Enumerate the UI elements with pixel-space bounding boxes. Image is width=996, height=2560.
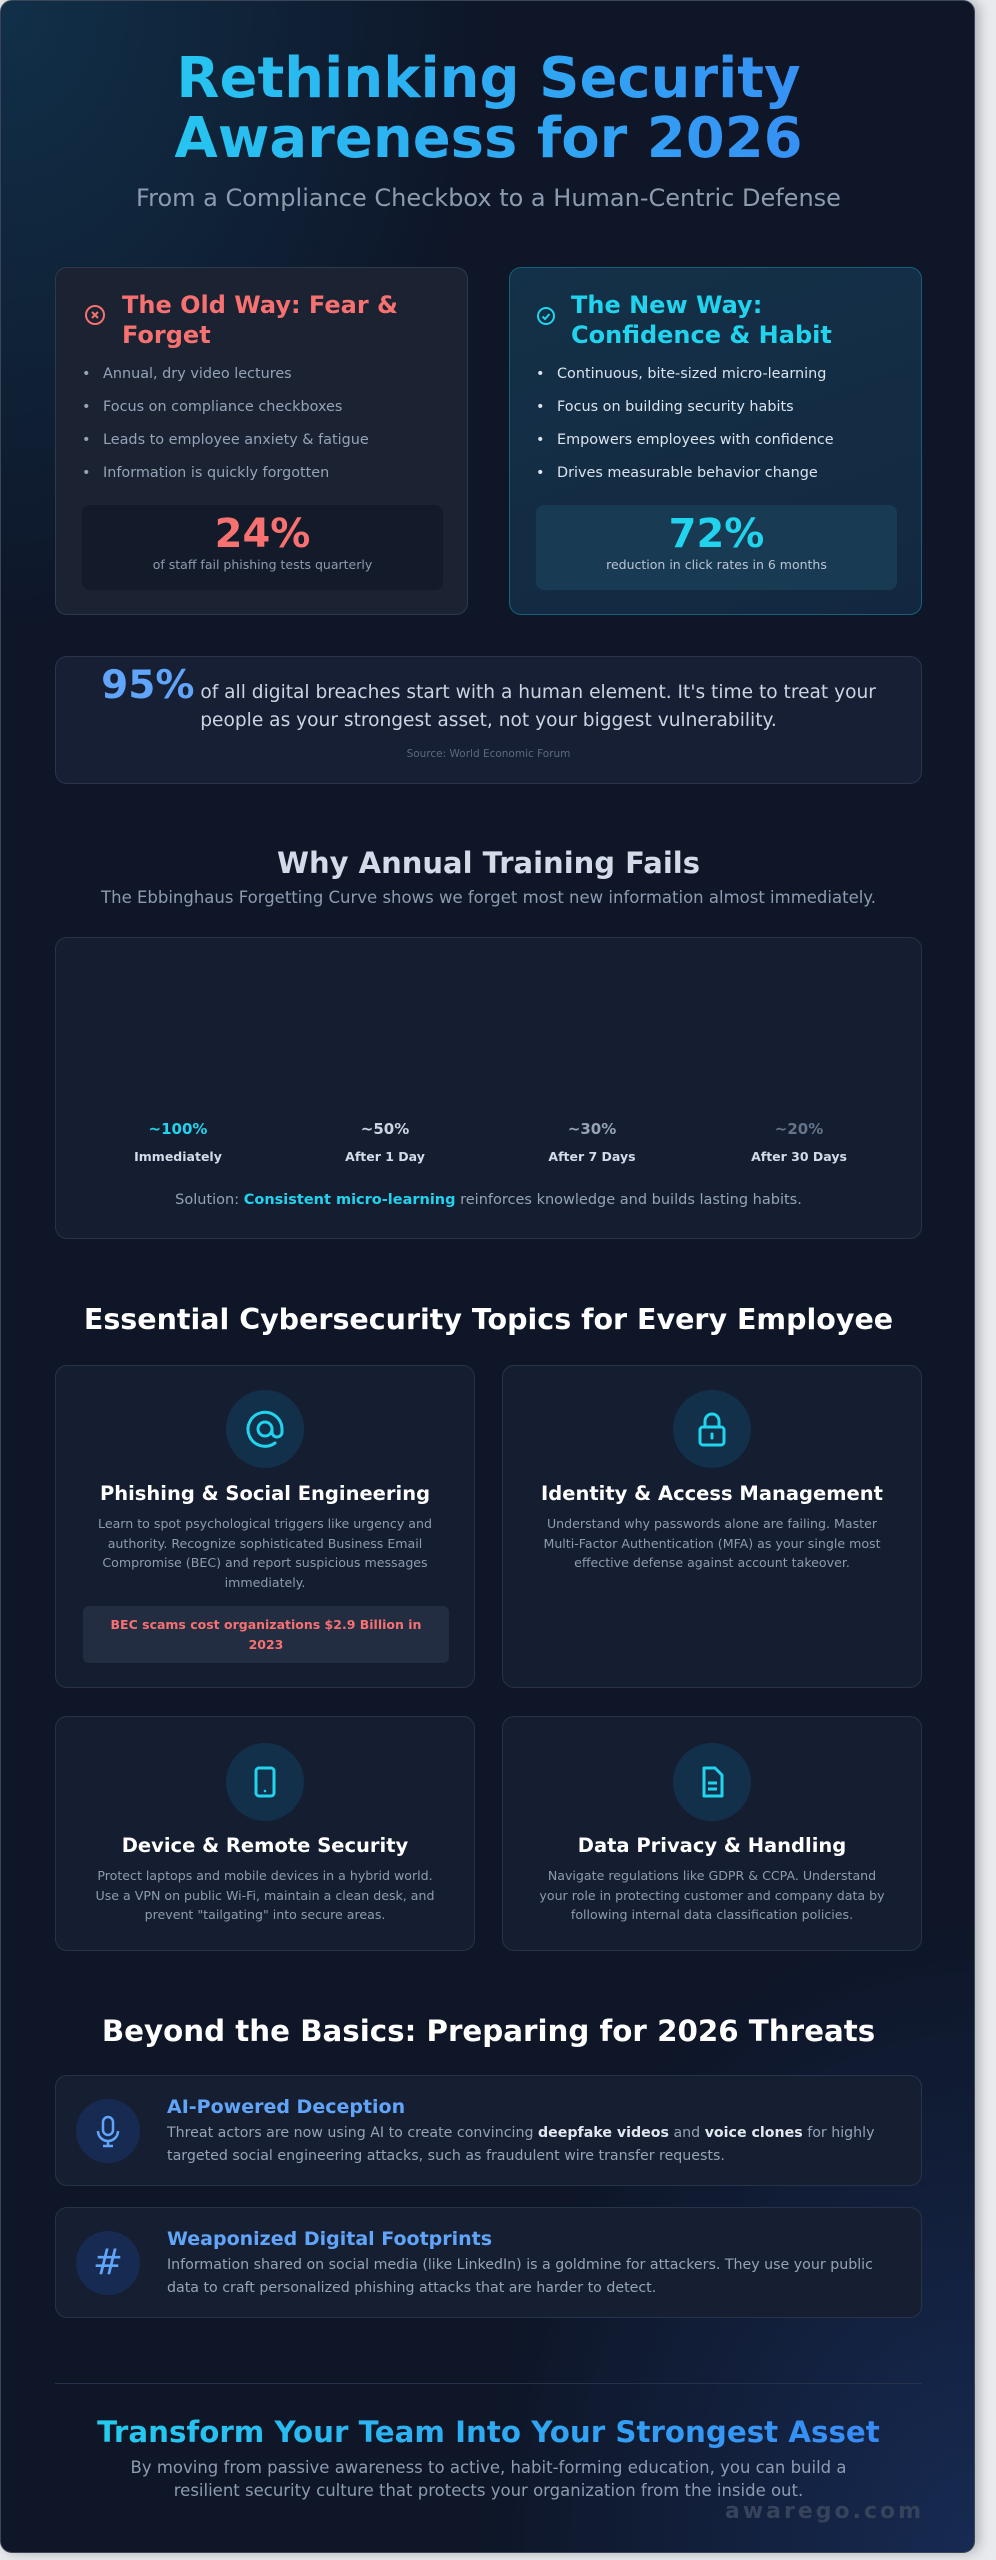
- stat: 72%: reduction in click rates in 6 months: [606, 557, 827, 572]
- icon: hash: [76, 2231, 140, 2295]
- data point: 30 days: [751, 1120, 847, 1164]
- list: new way: Continuous, bite-sized micro-learning: [557, 366, 826, 382]
- card: identity: [502, 1365, 922, 1688]
- callout: 95%: 95% of all digital breaches start with a human element. It's time to treat your: [101, 663, 876, 708]
- panel: old way: [55, 267, 468, 615]
- subtitle: forgetting curve: The Ebbinghaus Forgetting Curve shows we forget most new information almost immediately.: [101, 888, 876, 907]
- data point: 7 days: [548, 1120, 636, 1164]
- title: Rethinking Security: [176, 46, 801, 111]
- title: Awareness for 2026: [174, 106, 803, 171]
- card: data privacy: Navigate regulations like GDPR & CCPA. Understand your role in protecting customer and company data by following internal data classification policies.: [539, 1868, 885, 1922]
- title: [1, 49, 976, 169]
- callout: 95%: [55, 656, 922, 784]
- list: new way: Empowers employees with confidence: [557, 432, 834, 448]
- list: new way: [538, 366, 834, 481]
- card: identity: Understand why passwords alone are failing. Master Multi-Factor Authentication (MFA) as your single most effective defense against account takeover.: [543, 1516, 881, 1570]
- card: AI deception: AI-Powered Deception: [167, 2096, 405, 2118]
- icon: hash: #: [93, 2242, 123, 2283]
- card: data privacy: [502, 1716, 922, 1951]
- data point: 1 day: ~50%: [361, 1120, 409, 1138]
- list: new way: Focus on building security habits: [557, 399, 794, 415]
- stat: 24%: 24%: [215, 511, 310, 557]
- heading: old way: Forget: [122, 321, 211, 349]
- card: digital footprints: Information shared on social media (like LinkedIn) is a goldmine for attackers. They use your public data to craft personalized phishing attacks that are harder to detect.: [167, 2257, 873, 2296]
- data point: 1 day: After 1 Day: [345, 1149, 425, 1164]
- stat: 72%: 72%: [669, 511, 764, 557]
- card: phishing: Phishing & Social Engineering: [100, 1482, 430, 1505]
- card: device: [55, 1716, 475, 1951]
- chart: forgetting curve: [55, 937, 922, 1239]
- closing text: [130, 2458, 846, 2500]
- card: AI deception: [55, 2075, 922, 2186]
- card: phishing: Learn to spot psychological triggers like urgency and authority. Recognize sophisticated Business Email Compromise (BEC) and report suspicious messages immediately.: [98, 1516, 432, 1590]
- data point: 30 days: After 30 Days: [751, 1149, 847, 1164]
- icon: microphone: [76, 2099, 140, 2163]
- data point: 1 day: [345, 1120, 425, 1164]
- list: old way: Annual, dry video lectures: [103, 366, 292, 382]
- data point: immediately: Immediately: [134, 1149, 222, 1164]
- icon: at sign: [226, 1390, 304, 1468]
- icon: lock: [673, 1390, 751, 1468]
- icon: phone: [226, 1743, 304, 1821]
- heading: beyond the basics: Beyond the Basics: Preparing for 2026 Threats: [102, 2014, 875, 2048]
- callout: BEC: BEC scams cost organizations $2.9 Billion in: [111, 1617, 421, 1632]
- card: device: Device & Remote Security: [122, 1834, 408, 1857]
- closing text: resilient security culture that protects your organization from the inside out.: [174, 2481, 803, 2500]
- callout: BEC: 2023: [249, 1636, 283, 1652]
- list: old way: Leads to employee anxiety & fatigue: [103, 432, 369, 448]
- stat: 24%: [82, 505, 443, 590]
- heading: old way: The Old Way: Fear &: [122, 291, 398, 319]
- card: device: Protect laptops and mobile devices in a hybrid world. Use a VPN on public Wi-Fi, maintain a clean desk, and prevent "tailgating" into secure areas.: [95, 1868, 435, 1922]
- callout: BEC: [83, 1606, 449, 1663]
- card: identity: Identity & Access Management: [541, 1482, 883, 1505]
- card: AI deception: Threat actors are now using AI to create convincing deepfake videos and voice clones for highly targeted social engineering attacks, such as fraudulent wire transfer requests.: [167, 2125, 875, 2164]
- callout: 95%: Source: World Economic Forum: [407, 748, 570, 760]
- card: digital footprints: [55, 2207, 922, 2318]
- heading: why annual training fails: Why Annual Training Fails: [277, 846, 700, 880]
- stat: 72%: [536, 505, 897, 590]
- data point: 30 days: ~20%: [775, 1120, 823, 1138]
- heading: old way: [122, 291, 398, 349]
- heading: essential topics: Essential Cybersecurity Topics for Every Employee: [84, 1303, 893, 1336]
- heading: new way: [571, 291, 832, 349]
- card: phishing: [55, 1365, 475, 1688]
- data point: 7 days: ~30%: [568, 1120, 616, 1138]
- card: data privacy: Data Privacy & Handling: [578, 1834, 846, 1857]
- heading: new way: The New Way:: [571, 291, 762, 319]
- stat: 24%: of staff fail phishing tests quarterly: [153, 557, 372, 572]
- closing text: By moving from passive awareness to active, habit-forming education, you can build a: [130, 2458, 846, 2477]
- data point: immediately: ~100%: [149, 1120, 207, 1138]
- heading: new way: Confidence & Habit: [571, 321, 832, 349]
- solution text: Solution: Consistent micro-learning reinforces knowledge and builds lasting habits.: [175, 1192, 802, 1208]
- data point: immediately: [134, 1120, 222, 1164]
- subtitle: From a Compliance Checkbox to a Human-Centric Defense: [136, 184, 841, 212]
- card: digital footprints: Weaponized Digital Footprints: [167, 2228, 492, 2250]
- list: new way: Drives measurable behavior change: [557, 465, 818, 481]
- icon: check circle: [537, 307, 555, 325]
- data point: 7 days: After 7 Days: [548, 1149, 636, 1164]
- callout: 95%: people as your strongest asset, not your biggest vulnerability.: [200, 710, 777, 731]
- list: old way: Information is quickly forgotten: [103, 465, 329, 481]
- icon: x circle: [85, 305, 105, 325]
- watermark: awarego.com: [725, 2499, 924, 2524]
- list: old way: Focus on compliance checkboxes: [103, 399, 342, 415]
- list: old way: [84, 366, 369, 481]
- panel: new way: [509, 267, 922, 615]
- heading: transform your team: Transform Your Team Into Your Strongest Asset: [97, 2415, 880, 2449]
- icon: document: [673, 1743, 751, 1821]
